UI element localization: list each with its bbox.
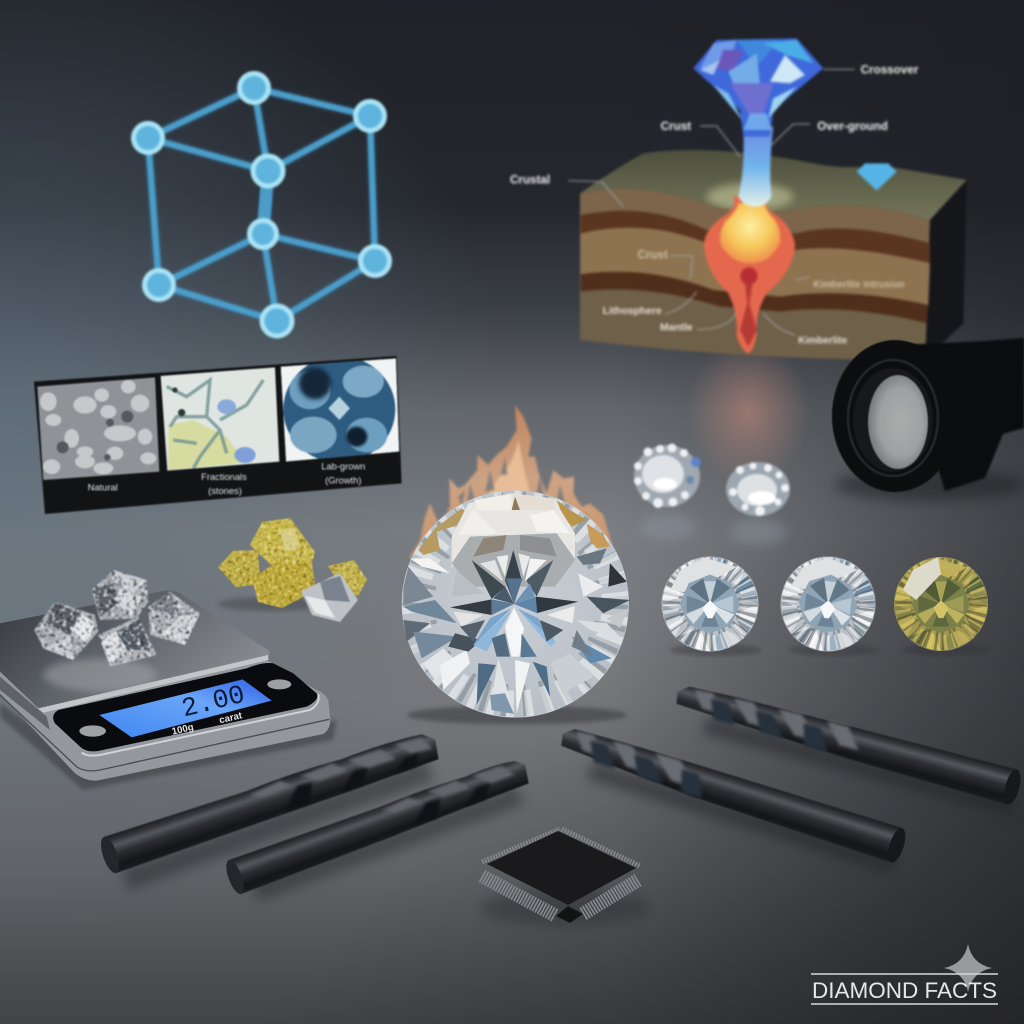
scale shadow bbox=[0, 703, 337, 790]
block right side bbox=[925, 180, 967, 360]
diamond shadow bbox=[407, 706, 627, 724]
hero diamond with flames bbox=[402, 405, 630, 724]
drill bit 2 bbox=[223, 753, 533, 896]
back diamond right bbox=[726, 462, 790, 516]
callout leader lines bbox=[568, 69, 855, 335]
chip pins bbox=[482, 829, 640, 916]
pan bbox=[0, 590, 270, 709]
callout labels: Mantle bbox=[660, 323, 693, 334]
geological cross-section: diamond formation bbox=[510, 38, 967, 360]
top stone bbox=[92, 570, 148, 620]
brand name: DIAMOND FACTS bbox=[812, 978, 997, 1003]
clear rough diamond bbox=[301, 573, 358, 622]
natural micrograph bbox=[37, 377, 159, 480]
callout labels: Crossover bbox=[861, 64, 919, 77]
reading caption bbox=[171, 710, 244, 738]
callout labels: Kimberlite bbox=[798, 335, 848, 346]
rim shards bbox=[419, 507, 612, 701]
diamond body bbox=[402, 490, 630, 718]
panel captions bbox=[88, 461, 365, 496]
crown facets wash bbox=[452, 493, 575, 568]
panel captions: Lab-grown bbox=[321, 461, 365, 471]
rough diamonds bbox=[34, 570, 200, 667]
microstructure comparison panel bbox=[34, 356, 402, 514]
lens bbox=[868, 375, 928, 469]
hologram diamond bbox=[693, 38, 823, 137]
magma chamber bbox=[704, 197, 795, 353]
floor reflections bbox=[640, 513, 786, 545]
callout labels bbox=[510, 64, 919, 346]
drill bit 1 bbox=[97, 727, 443, 880]
panel captions: Natural bbox=[88, 483, 118, 493]
panel captions: Fractionals bbox=[201, 472, 247, 482]
drill bit 4 bbox=[671, 680, 1024, 808]
flames bbox=[408, 405, 613, 558]
callout labels: Crust bbox=[661, 120, 691, 133]
precision scale with rough diamonds bbox=[0, 570, 337, 790]
back diamond left bbox=[634, 444, 701, 508]
colourless round diamonds bbox=[662, 552, 880, 656]
reading caption: carat bbox=[218, 710, 244, 726]
lcd screen bbox=[99, 679, 272, 737]
small surface diamond bbox=[857, 163, 897, 191]
table star bbox=[472, 560, 505, 599]
front stone bbox=[98, 617, 157, 667]
callout labels: Crustal bbox=[510, 173, 550, 186]
panel captions: (Growth) bbox=[325, 475, 361, 485]
drill bit 3 bbox=[556, 722, 909, 866]
yellow rough diamonds bbox=[218, 518, 367, 622]
brand lockup bbox=[811, 944, 998, 1004]
microchip bbox=[480, 829, 650, 926]
pan reflection bbox=[43, 658, 157, 692]
lcd reading: 2.00 bbox=[179, 681, 248, 725]
callout labels: Crust bbox=[637, 249, 668, 262]
callout labels: Kimberlite intrusion bbox=[813, 279, 905, 290]
scale base bbox=[0, 660, 330, 781]
kimberlite pipe beam bbox=[738, 127, 773, 207]
upper gold reflections bbox=[418, 508, 468, 555]
reading caption: 100g bbox=[171, 722, 195, 738]
flashlight / loupe bbox=[832, 338, 1024, 501]
small diamonds (back row) bbox=[634, 444, 790, 545]
callout labels: Lithosphere bbox=[603, 306, 662, 317]
digital display housing bbox=[53, 663, 317, 751]
lab-grown micrograph bbox=[281, 356, 399, 463]
molecular lattice cube bbox=[134, 74, 390, 336]
outer facets bbox=[410, 558, 450, 573]
panel captions: (stones) bbox=[208, 486, 242, 496]
block top surface bbox=[580, 150, 967, 220]
left stone bbox=[34, 602, 98, 660]
fractional micrograph bbox=[161, 367, 279, 471]
sediment layers bbox=[580, 189, 930, 360]
buttons bbox=[267, 679, 291, 689]
yellow round diamond bbox=[894, 557, 990, 656]
brand rules bbox=[811, 974, 998, 1004]
right stone bbox=[148, 592, 200, 645]
surface glow bbox=[707, 183, 793, 210]
callout labels: Over-ground bbox=[817, 120, 888, 133]
sparkle icon bbox=[944, 944, 992, 992]
